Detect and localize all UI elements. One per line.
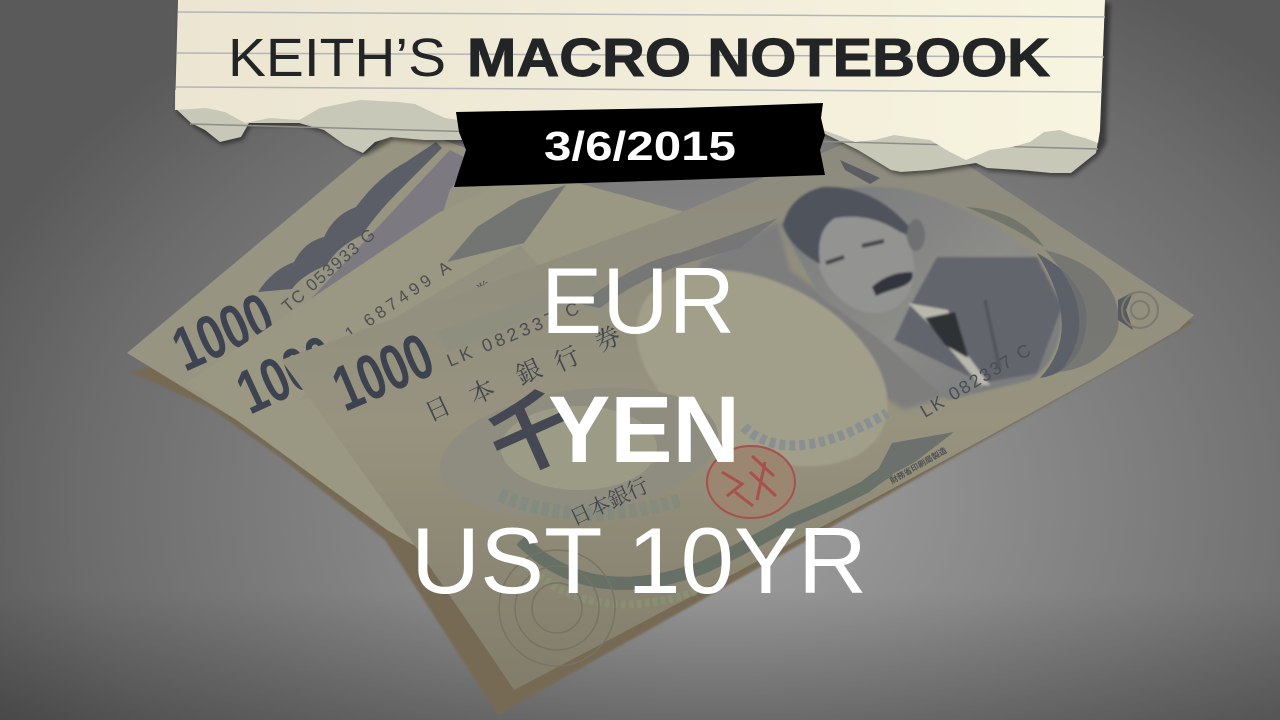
title: KEITH’S — [228, 28, 446, 88]
label: YEN: YEN — [548, 377, 740, 483]
middle banknote: 1 687499 A — [342, 257, 455, 343]
torn lower edge — [175, 90, 1100, 173]
red seal — [707, 446, 795, 518]
middle banknote: 1000 — [227, 323, 347, 428]
photo: yen banknotes — [127, 120, 1194, 715]
corner ornament: 財務省印刷局製造 — [888, 445, 949, 487]
date: 3/6/2015 — [544, 123, 736, 169]
green arc band — [521, 470, 890, 583]
torn notebook paper — [175, 0, 1110, 176]
portrait — [780, 185, 1062, 400]
guilloche rosette: 本 — [462, 369, 500, 412]
front banknote — [281, 120, 1194, 690]
guilloche rosette: 券 — [588, 316, 626, 359]
watermark oval — [603, 230, 921, 506]
rings ornament — [840, 160, 1158, 378]
serial numbers — [444, 298, 1034, 421]
middle banknote — [186, 170, 860, 560]
kanji: 千 — [466, 358, 590, 500]
back banknote: 1000 — [163, 280, 284, 385]
guilloche rosette: 日本銀行 — [564, 470, 653, 532]
diamond border of oval — [744, 413, 887, 445]
label: EUR: EUR — [541, 248, 735, 353]
paper shadow — [177, 3, 1110, 176]
lower rings — [499, 550, 615, 666]
tan underside of notes — [130, 300, 1194, 715]
guilloche rosette: 行 — [547, 336, 585, 379]
date tape — [454, 103, 825, 187]
corner ornament — [869, 432, 954, 487]
stripe band under top edge — [435, 272, 600, 352]
serial numbers: LK 082337 C — [444, 298, 582, 371]
scalloped ornament — [580, 218, 778, 308]
paper sheet — [175, 0, 1105, 160]
back banknote — [127, 125, 700, 520]
title — [228, 28, 1050, 88]
guilloche rosette — [418, 316, 726, 533]
guilloche rosette: 銀 — [509, 349, 547, 392]
middle banknote: 券 — [471, 274, 496, 302]
title: MACRO NOTEBOOK — [467, 28, 1050, 88]
portrait shading crescent — [700, 222, 950, 410]
back banknote: TC 053933 G — [278, 225, 379, 316]
serial numbers: LK 082337 C — [917, 340, 1034, 421]
label: UST 10YR: UST 10YR — [411, 508, 867, 613]
guilloche rosette: 日 — [418, 386, 456, 429]
large 1000 numeral: 1000 — [322, 319, 443, 425]
